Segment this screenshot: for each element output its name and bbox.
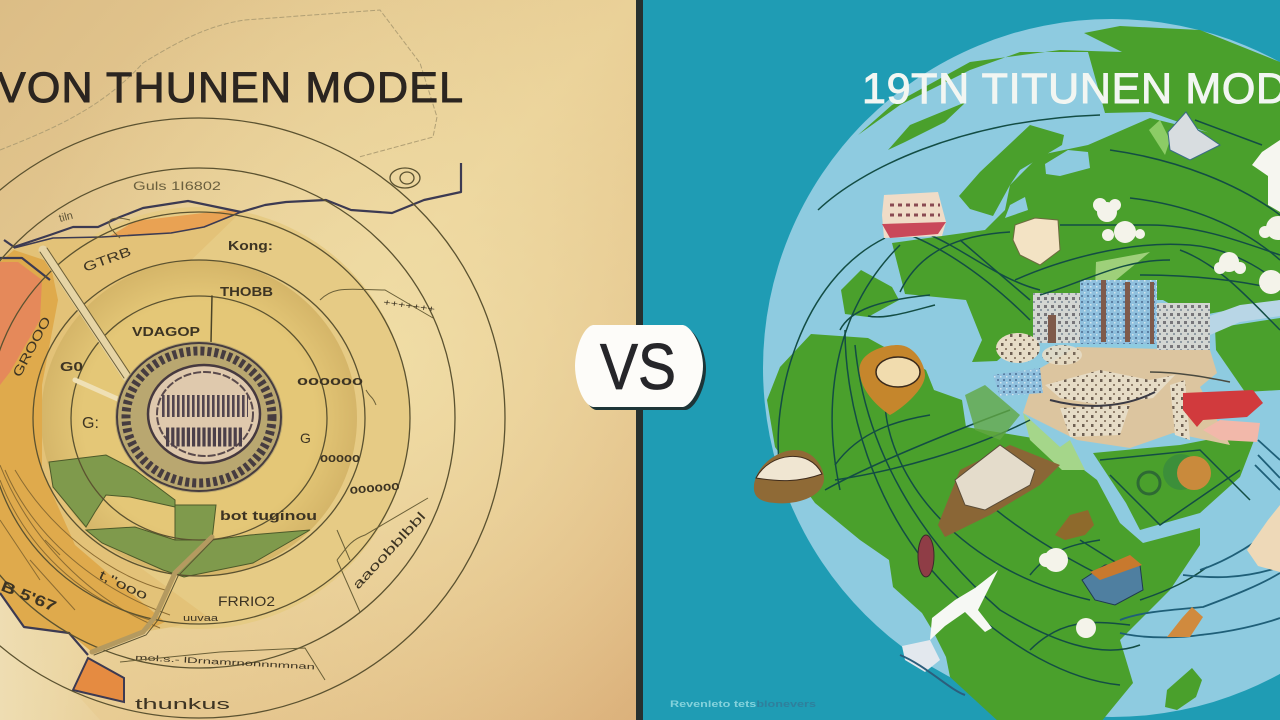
faint old boundary line [0,10,437,157]
title: von Thunen model: VON THUNEN MODEL [0,64,463,112]
title: 19th Thunen model: 19TN TITUNEN MOD [862,65,1280,113]
small ring mark [390,168,420,188]
icon: beige cargo at right edge [1247,505,1280,572]
land: northern strip and Asia [841,26,1280,392]
map labels: uuvaa [183,613,218,623]
central city [115,341,283,493]
map labels: ooooo [320,450,360,465]
coastline and rivers [0,163,461,655]
pale sea in the lower left [0,595,91,720]
map labels: +++++++ [383,297,436,314]
map labels: bot tuginou [220,508,317,523]
icon: coastal vegetation [965,385,1020,440]
map labels: G: [82,415,99,432]
hatched farmland in the south west [0,465,170,628]
icon: white plane top right [1252,140,1280,212]
map labels: G0 [60,359,83,374]
map labels: THOBB [220,284,273,299]
land: Arabia [1093,440,1254,530]
map labels: thunkus [135,696,230,713]
centre divider [636,0,643,720]
map labels: Guls 1I6802 [133,179,221,193]
map labels: VDAGOP [132,324,200,339]
icon: orange tiger [1167,607,1203,637]
ocean shipping lines [1120,440,1280,637]
orange bottom territory [73,658,124,702]
map labels: oooooo [297,373,363,388]
icon: orange fruit basket [1138,454,1211,494]
beige Middle East desert [1023,347,1230,448]
map labels: t,"ooo [97,567,150,603]
map labels: aaoobblbbl [349,509,429,592]
panel: historic von Thunen map [0,0,637,720]
icon: white flowers [1039,198,1280,638]
map labels: tiln [58,210,74,225]
icon: cake-like port ship [882,192,946,238]
icon: market boat [938,445,1060,537]
map labels: G [300,430,311,446]
icon: cream cargo blob [1013,218,1060,265]
map labels: GROOO [9,314,54,379]
VS badge: VS [600,330,676,403]
icon: blue fishing boat [1082,555,1143,605]
route lines [778,115,1280,685]
city skyline [993,280,1230,440]
land: Africa [767,334,1200,720]
globe ocean [763,19,1280,717]
concentric land-use rings [0,118,505,718]
thin survey lines [109,218,433,680]
map labels [0,179,436,713]
VS badge [575,325,706,410]
icon: splash on the coast [900,640,965,695]
inland sea [1045,150,1090,176]
panel: globalised world model [643,0,1280,720]
map labels: oooooo [349,478,400,497]
map labels: FRRIO2 [218,593,275,609]
icon: brown sack [1055,510,1094,540]
land: Madagascar [1165,668,1202,710]
map land area [0,207,410,652]
river plain east of the city [1210,300,1280,335]
icon: mountain [1168,112,1220,160]
icon: white aeroplane [930,570,998,640]
roads to the central city [40,248,214,655]
icon: bread basket [754,450,824,503]
scattered white settlements [993,333,1230,440]
map labels: Kong: [228,238,273,253]
green fields [49,455,310,577]
pale green coast patch [1023,413,1085,470]
footer credit: Revenleto tets blonevers [670,699,816,709]
pale leaf patch [1149,120,1170,155]
icon: red barn [1183,390,1263,442]
map labels: GTRB [81,244,133,275]
icon: orange region with food [859,345,925,415]
icon: red beads [918,535,934,577]
land: light-green steppe patch [1095,252,1150,280]
map labels: mol.s.- lDrnamrnonnnmnan [135,653,315,671]
